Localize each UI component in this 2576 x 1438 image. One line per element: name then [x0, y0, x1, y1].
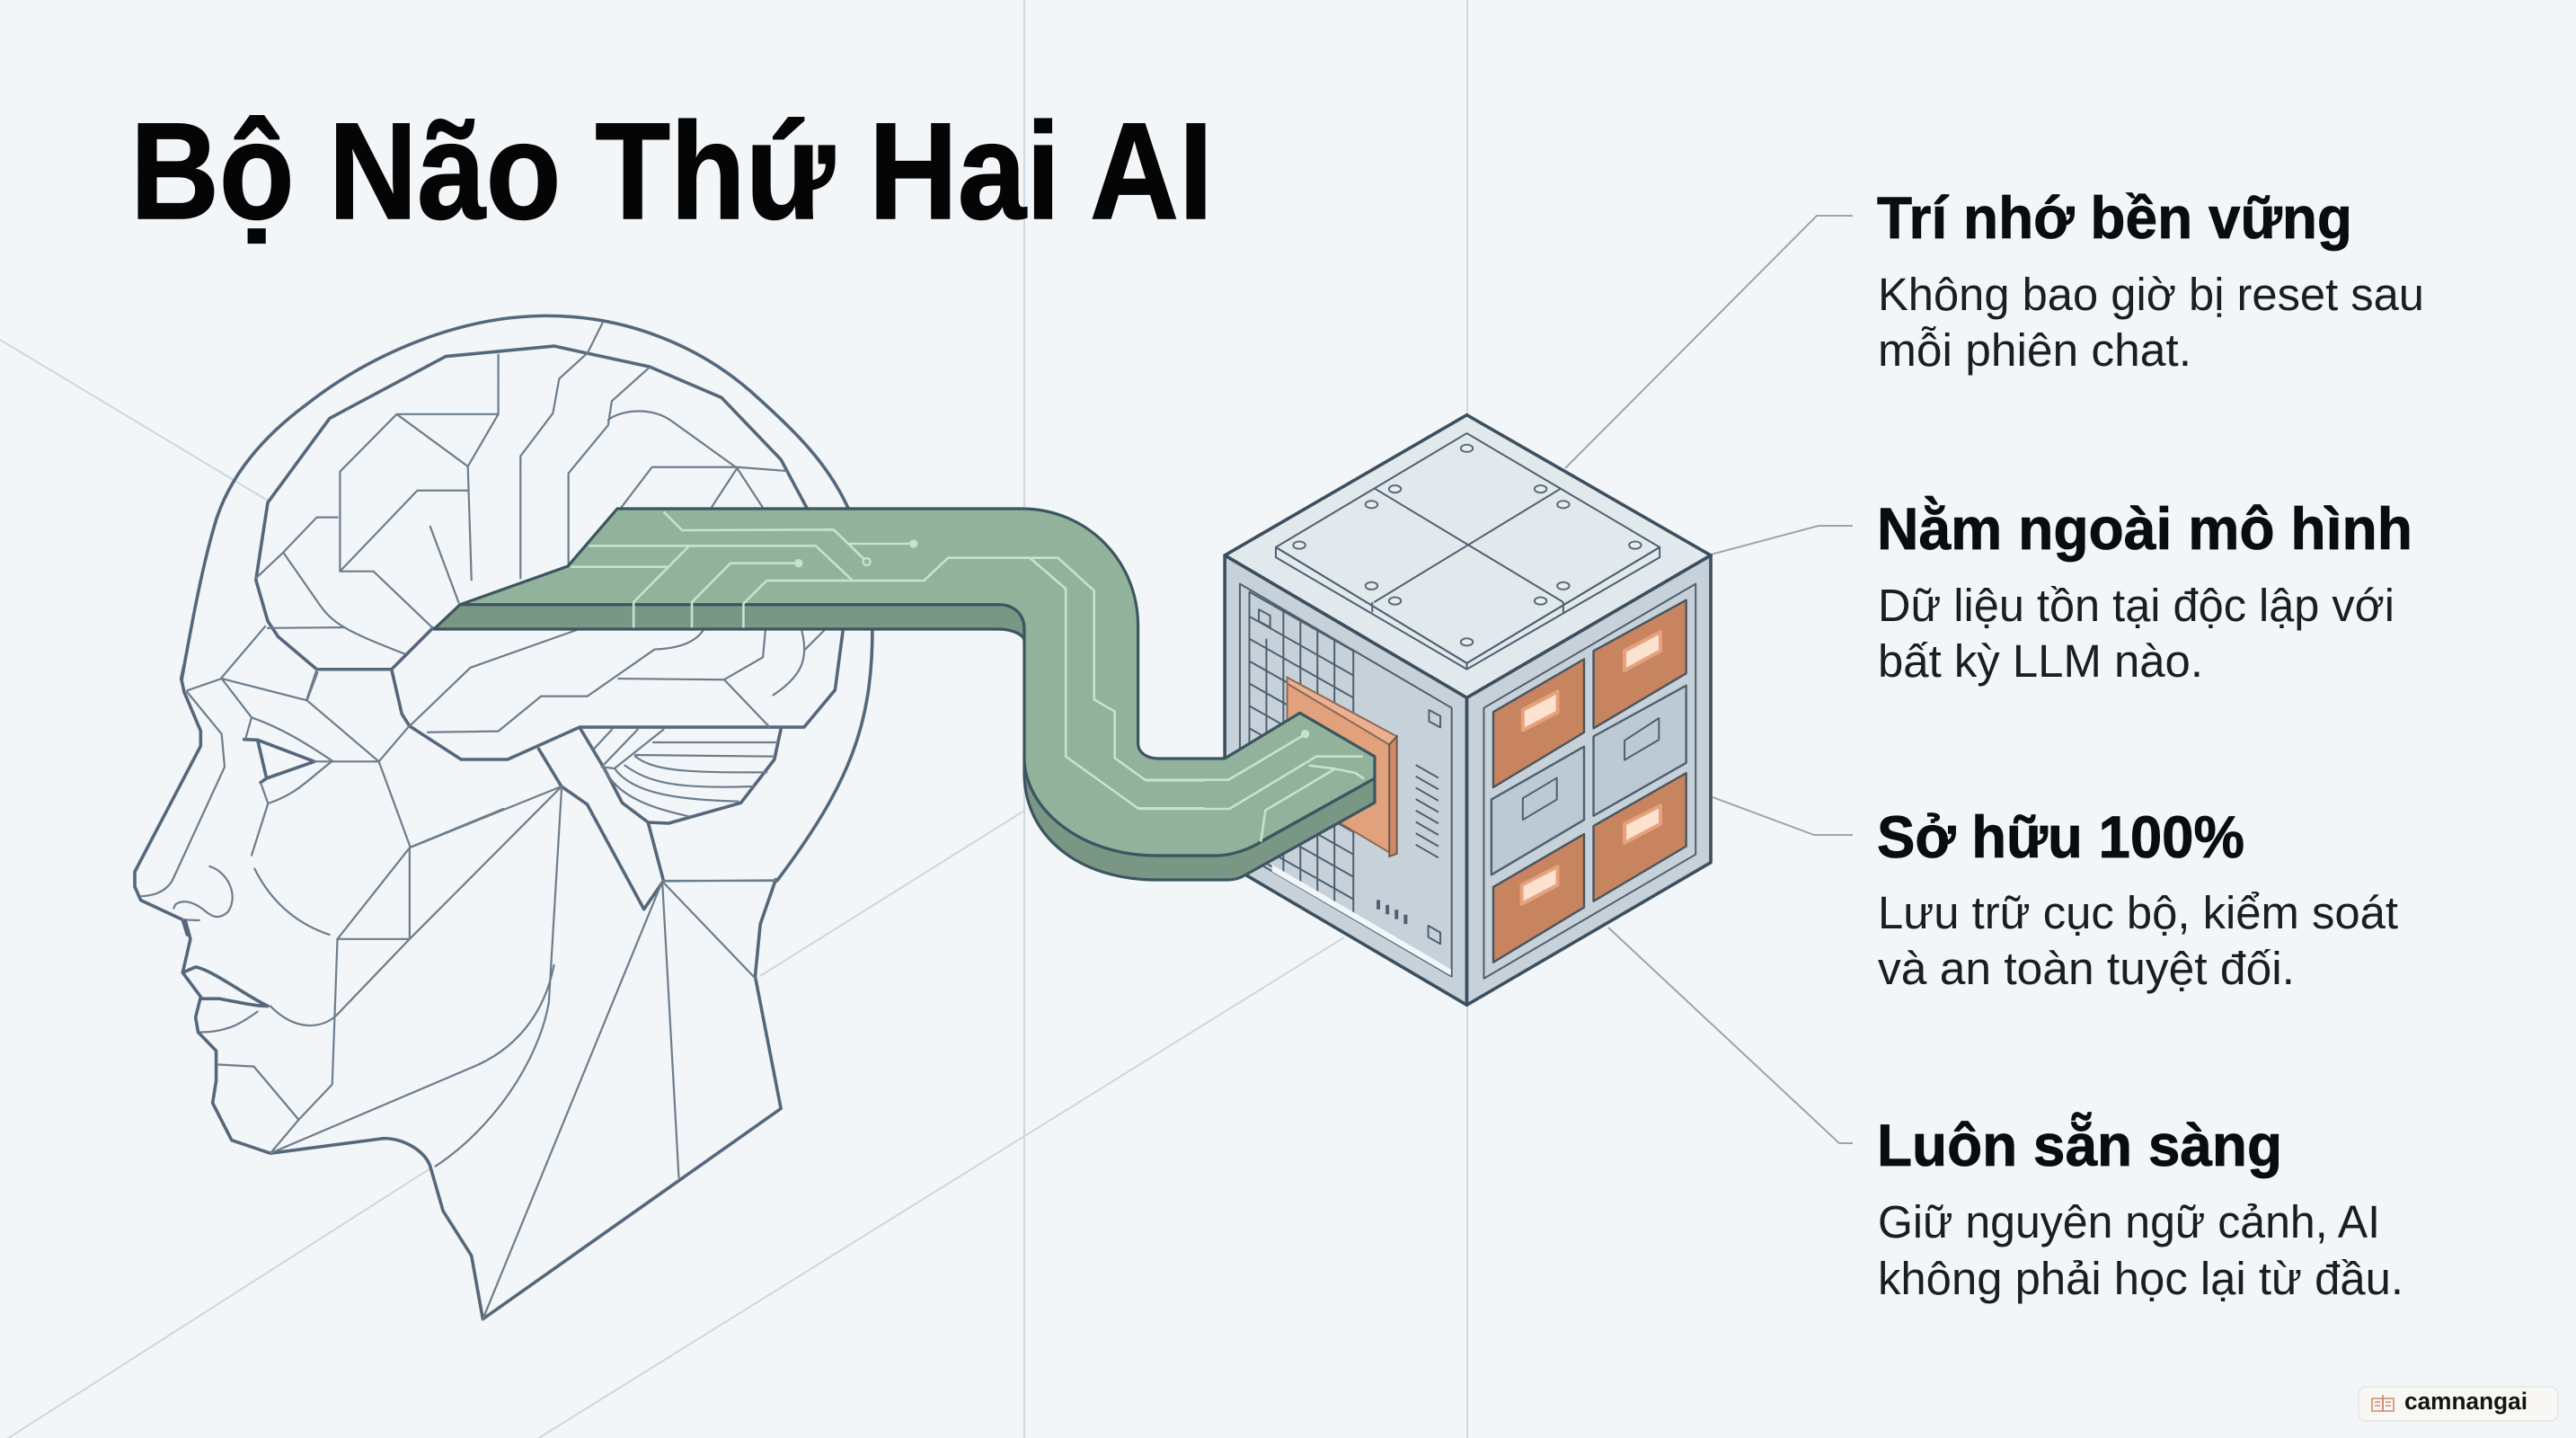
illustration: line-art human head with brain [135, 315, 872, 1319]
drawers [1492, 600, 1686, 963]
orange port plate [1288, 678, 1397, 857]
brain folds [221, 322, 825, 732]
feature: always available [1877, 1112, 2403, 1304]
cerebellum and neck back [539, 629, 872, 910]
cube right face [1467, 555, 1711, 1005]
eye [244, 740, 314, 783]
left face inner panel [1240, 584, 1452, 977]
illustration: isometric storage cube [1225, 415, 1711, 1005]
feature list [1877, 184, 2424, 1304]
face lower section and neck [182, 786, 781, 1319]
cube top face [1225, 415, 1711, 697]
brain outline [256, 346, 843, 759]
brow and cheek facets [141, 672, 503, 935]
feature: outside the model: bất kỳ LLM nào. [1878, 635, 2203, 687]
feature: always available: Giữ nguyên ngữ cảnh, AI [1878, 1196, 2380, 1247]
top plate [1276, 433, 1660, 670]
vent slots [1416, 765, 1438, 857]
skull outline [181, 315, 848, 679]
mouth [182, 967, 268, 1006]
left face small screws [1259, 609, 1440, 944]
cube left face [1225, 555, 1467, 1005]
feature: outside the model [1877, 495, 2412, 687]
feature: outside the model: Dữ liệu tồn tại độc lập với [1878, 580, 2395, 631]
feature: always available: Luôn sẵn sàng [1877, 1112, 2282, 1178]
green circuit ribbon connecting brain and cube [434, 509, 1375, 880]
feature: full ownership: Sở hữu 100% [1877, 803, 2244, 870]
facial facets [200, 786, 775, 1319]
icon: open book [2372, 1395, 2394, 1411]
feature: full ownership: Lưu trữ cục bộ, kiểm soát [1878, 887, 2398, 938]
circuit traces on ribbon [571, 511, 1364, 842]
title: Bộ Não Thứ Hai AI [130, 94, 1213, 248]
watermark badge [2359, 1387, 2558, 1421]
watermark badge: camnangai [2404, 1388, 2527, 1415]
face profile and neck outline [182, 880, 781, 1319]
feature: persistent memory [1877, 184, 2424, 376]
feature: full ownership [1877, 803, 2398, 994]
feature: persistent memory: mỗi phiên chat. [1878, 324, 2191, 376]
indicator ticks [1378, 900, 1405, 924]
feature: always available: không phải học lại từ đầu. [1878, 1253, 2403, 1304]
feature: outside the model: Nằm ngoài mô hình [1877, 495, 2412, 562]
forehead and nose profile [135, 665, 200, 935]
eye, nose and brow region [135, 665, 503, 935]
feature: persistent memory: Trí nhớ bền vững [1877, 184, 2352, 251]
ribbon top surface [460, 509, 1375, 856]
right face inner panel [1483, 584, 1695, 979]
callout leader lines [1565, 216, 1853, 1143]
ribbon side faces [434, 605, 1375, 880]
feature: full ownership: và an toàn tuyệt đối. [1878, 943, 2295, 994]
feature: persistent memory: Không bao giờ bị reset sau [1878, 269, 2424, 320]
head and brain upper section [181, 315, 848, 759]
